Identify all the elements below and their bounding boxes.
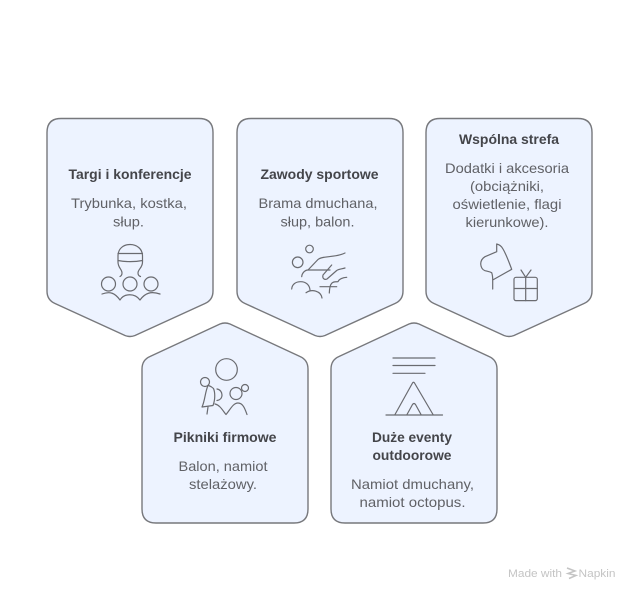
text: Wspólna strefa description bbox=[445, 160, 569, 230]
icon: flag and gift box bbox=[481, 244, 537, 301]
heading: Duże eventy outdoorowe bbox=[372, 429, 452, 463]
text: Targi i konferencje description: słup. bbox=[113, 214, 144, 230]
text: Wspólna strefa description: kierunkowe). bbox=[466, 214, 548, 230]
text: Zawody sportowe description: słup, balon. bbox=[280, 214, 354, 230]
panel: Wspólna strefa bbox=[426, 118, 592, 336]
text: Targi i konferencje description bbox=[71, 195, 187, 230]
panel: Zawody sportowe bbox=[237, 118, 403, 336]
icon: tent bbox=[386, 358, 442, 415]
text: Duże eventy outdoorowe description bbox=[351, 476, 474, 510]
text: Zawody sportowe description: Brama dmuchana, bbox=[258, 195, 378, 211]
panel: Duże eventy outdoorowe bbox=[331, 323, 497, 523]
heading: Zawody sportowe: Zawody sportowe bbox=[260, 166, 379, 182]
text: Wspólna strefa description: oświetlenie, flagi bbox=[452, 196, 562, 212]
watermark: Made with Napkin: Napkin bbox=[578, 568, 616, 580]
heading: Targi i konferencje: Targi i konferencje bbox=[68, 166, 192, 182]
panel: Targi i konferencje bbox=[47, 118, 213, 336]
heading: Duże eventy outdoorowe: Duże eventy bbox=[372, 429, 452, 445]
text: Wspólna strefa description: (obciążniki, bbox=[470, 178, 544, 194]
watermark: Made with Napkin bbox=[508, 568, 616, 580]
text: Wspólna strefa description: Dodatki i akcesoria bbox=[445, 160, 569, 176]
heading: Pikniki firmowe: Pikniki firmowe bbox=[174, 429, 277, 445]
text: Pikniki firmowe description: Balon, namiot bbox=[178, 458, 268, 474]
text: Duże eventy outdoorowe description: namiot octopus. bbox=[360, 494, 466, 510]
text: Pikniki firmowe description: stelażowy. bbox=[189, 476, 257, 492]
text: Zawody sportowe description bbox=[258, 195, 378, 230]
icon: speaker and audience bbox=[102, 244, 160, 300]
panel: Pikniki firmowe bbox=[142, 323, 308, 523]
text: Targi i konferencje description: Trybunka, kostka, bbox=[71, 195, 187, 211]
icon: Napkin logo bbox=[567, 568, 576, 578]
heading: Duże eventy outdoorowe: outdoorowe bbox=[372, 447, 452, 463]
text: Duże eventy outdoorowe description: Namiot dmuchany, bbox=[351, 476, 474, 492]
heading: Wspólna strefa: Wspólna strefa bbox=[459, 131, 559, 147]
watermark: Made with Napkin: Made with bbox=[508, 568, 562, 580]
icon: hand and balls bbox=[292, 245, 347, 298]
icon: family under balloon bbox=[200, 359, 248, 414]
text: Pikniki firmowe description bbox=[178, 458, 268, 492]
